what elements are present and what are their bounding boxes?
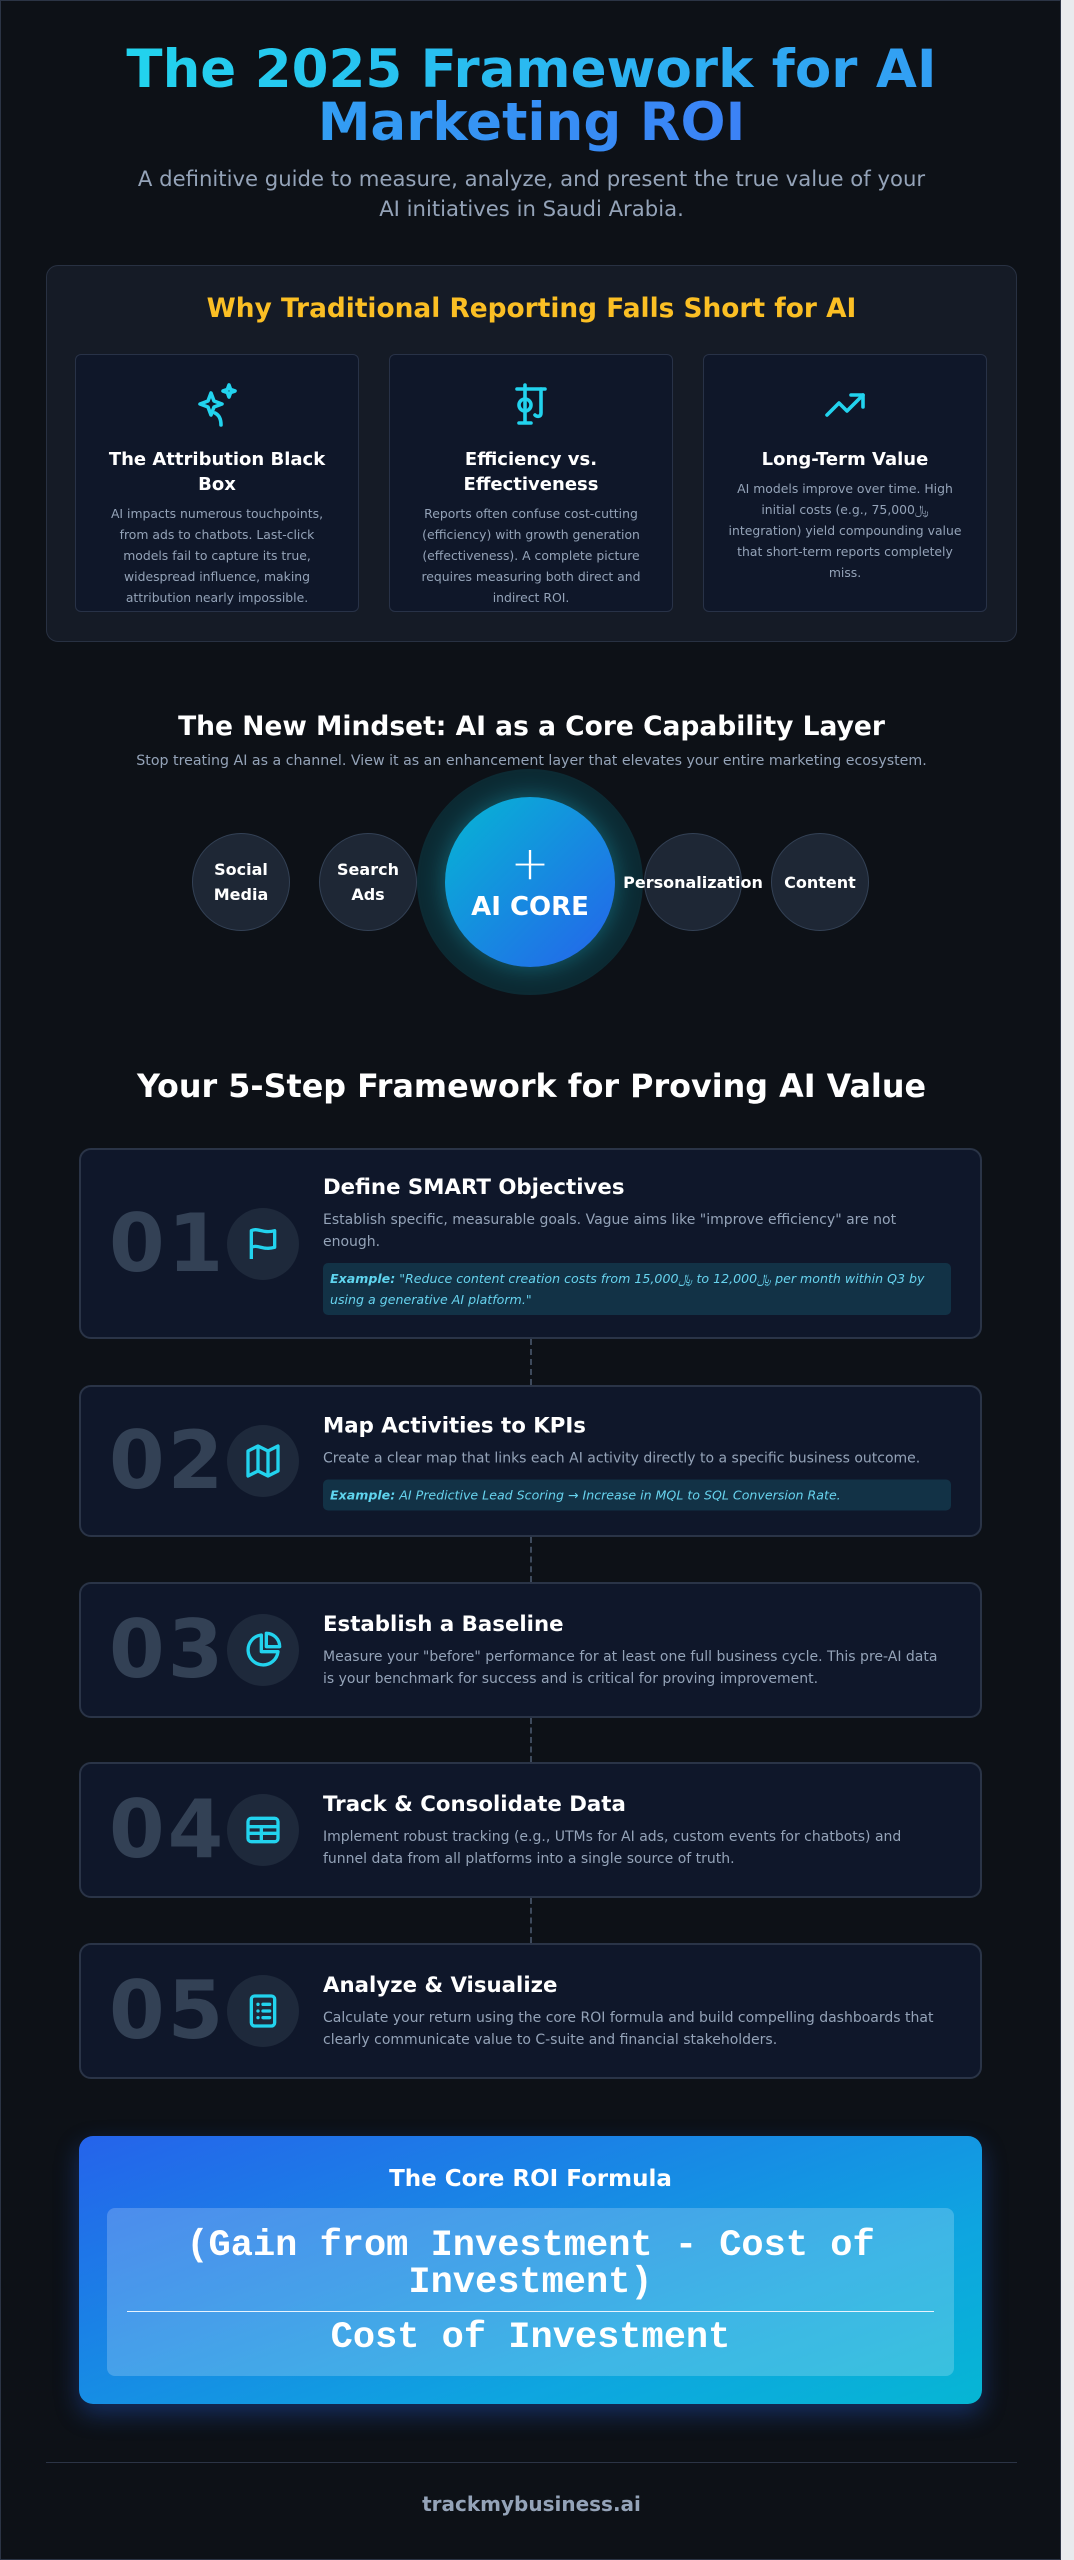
title: The 2025 Framework for AI <box>126 39 937 100</box>
step 4 <box>79 1762 982 1898</box>
step 3: 03 <box>109 1603 226 1696</box>
formula box: Cost of Investment <box>331 2317 730 2359</box>
step 4: Implement robust tracking (e.g., UTMs for AI ads, custom events for chatbots) and funnel data from all platforms into a single source of truth. <box>323 1829 901 1867</box>
step 3 <box>79 1582 982 1718</box>
card: attribution black box: AI impacts numerous touchpoints, from ads to chatbots. Last-click models fail to capture its true, widespread influence, making attribution nearly impossible. <box>111 506 323 605</box>
step 5: Calculate your return using the core ROI formula and build compelling dashboards that clearly communicate value to C-suite and financial stakeholders. <box>323 2010 933 2048</box>
circle: content <box>771 833 869 931</box>
icon: scale <box>515 383 547 425</box>
step 2: Example: AI Predictive Lead Scoring → Increase in MQL to SQL Conversion Rate. <box>330 1488 841 1502</box>
icon: trend up <box>825 393 865 417</box>
card: attribution black box: The Attribution Black Box <box>109 449 325 495</box>
circle: personalization <box>644 833 742 931</box>
subtitle <box>138 166 926 221</box>
circle: AI core <box>445 797 615 967</box>
formula box: (Gain from Investment - Cost of <box>186 2225 875 2267</box>
card: attribution black box <box>75 354 359 612</box>
step 4: Track & Consolidate Data <box>323 1792 626 1817</box>
icon: sparkles <box>198 383 237 427</box>
panel heading: Why Traditional Reporting Falls Short for AI <box>207 293 856 324</box>
card: efficiency vs effectiveness: Reports often confuse cost-cutting (efficiency) with growth generation (effectiveness). A complete picture requires measuring both direct and indirect ROI. <box>421 506 640 605</box>
card: efficiency vs effectiveness: Efficiency vs. Effectiveness <box>464 449 598 495</box>
card: efficiency vs effectiveness <box>389 354 673 612</box>
5-step heading: Your 5-Step Framework for Proving AI Value <box>137 1068 926 1105</box>
circle: search ads <box>319 833 417 931</box>
circle: content: Content <box>784 872 856 892</box>
diagram: AI core with channels <box>192 769 869 995</box>
ROI formula panel <box>79 2136 982 2404</box>
mindset subtitle: Stop treating AI as a channel. View it as an enhancement layer that elevates your entire marketing ecosystem. <box>136 753 927 769</box>
step 1: Define SMART Objectives <box>323 1174 625 1200</box>
icon: flag <box>227 1208 299 1280</box>
card: long-term value <box>703 354 987 612</box>
step 5 <box>79 1943 982 2079</box>
step 1: Example: "Reduce content creation costs from 15,000﷼ to 12,000﷼ per month within Q3 by using a generative AI platform." <box>330 1270 924 1306</box>
circle: social media: Social <box>214 860 268 879</box>
circle: social media <box>192 833 290 931</box>
formula box: Investment) <box>408 2262 653 2304</box>
step 5: 05 <box>109 1964 226 2057</box>
step 2 <box>79 1385 982 1537</box>
panel: why traditional reporting falls short <box>46 265 1017 642</box>
card: long-term value: Long-Term Value <box>762 449 928 470</box>
title: Marketing ROI <box>318 92 745 153</box>
icon: table <box>227 1794 299 1866</box>
icon: map <box>227 1425 299 1497</box>
card: long-term value: AI models improve over time. High initial costs (e.g., 75,000﷼ integration) yield compounding value that short-term reports completely miss. <box>729 481 961 580</box>
subtitle: A definitive guide to measure, analyze, and present the true value of your <box>138 166 925 191</box>
mindset heading: The New Mindset: AI as a Core Capability Layer <box>178 711 885 742</box>
footer divider <box>46 2462 1017 2463</box>
formula title: The Core ROI Formula <box>389 2166 672 2192</box>
icon: pie chart <box>227 1614 299 1686</box>
step 4: 04 <box>109 1783 226 1876</box>
step 1: Establish specific, measurable goals. Vague aims like "improve efficiency" are not enough. <box>323 1212 896 1250</box>
circle: search ads: Ads <box>351 885 385 904</box>
title <box>126 39 937 153</box>
circle: personalization: Personalization <box>623 872 763 892</box>
step 3: Measure your "before" performance for at least one full business cycle. This pre-AI data is your benchmark for success and is critical for proving improvement. <box>323 1649 937 1687</box>
subtitle: AI initiatives in Saudi Arabia. <box>379 196 684 221</box>
circle: social media: Media <box>214 885 268 904</box>
step 3: Establish a Baseline <box>323 1612 564 1637</box>
step 2: Create a clear map that links each AI activity directly to a specific business outcome. <box>323 1450 920 1466</box>
step 1: 01 <box>109 1196 226 1290</box>
circle: search ads: Search <box>337 860 399 879</box>
circle: AI core: AI CORE <box>471 892 589 922</box>
step 5: Analyze & Visualize <box>323 1973 558 1998</box>
footer brand: trackmybusiness.ai <box>422 2492 641 2516</box>
icon: list <box>227 1975 299 2047</box>
step 2: Map Activities to KPIs <box>323 1414 586 1438</box>
circle: AI core: + <box>511 836 549 890</box>
connectors <box>530 1339 532 1385</box>
formula box <box>107 2208 954 2376</box>
step 2: 02 <box>109 1414 226 1507</box>
step 1 <box>79 1148 982 1339</box>
glow ring <box>417 769 643 995</box>
